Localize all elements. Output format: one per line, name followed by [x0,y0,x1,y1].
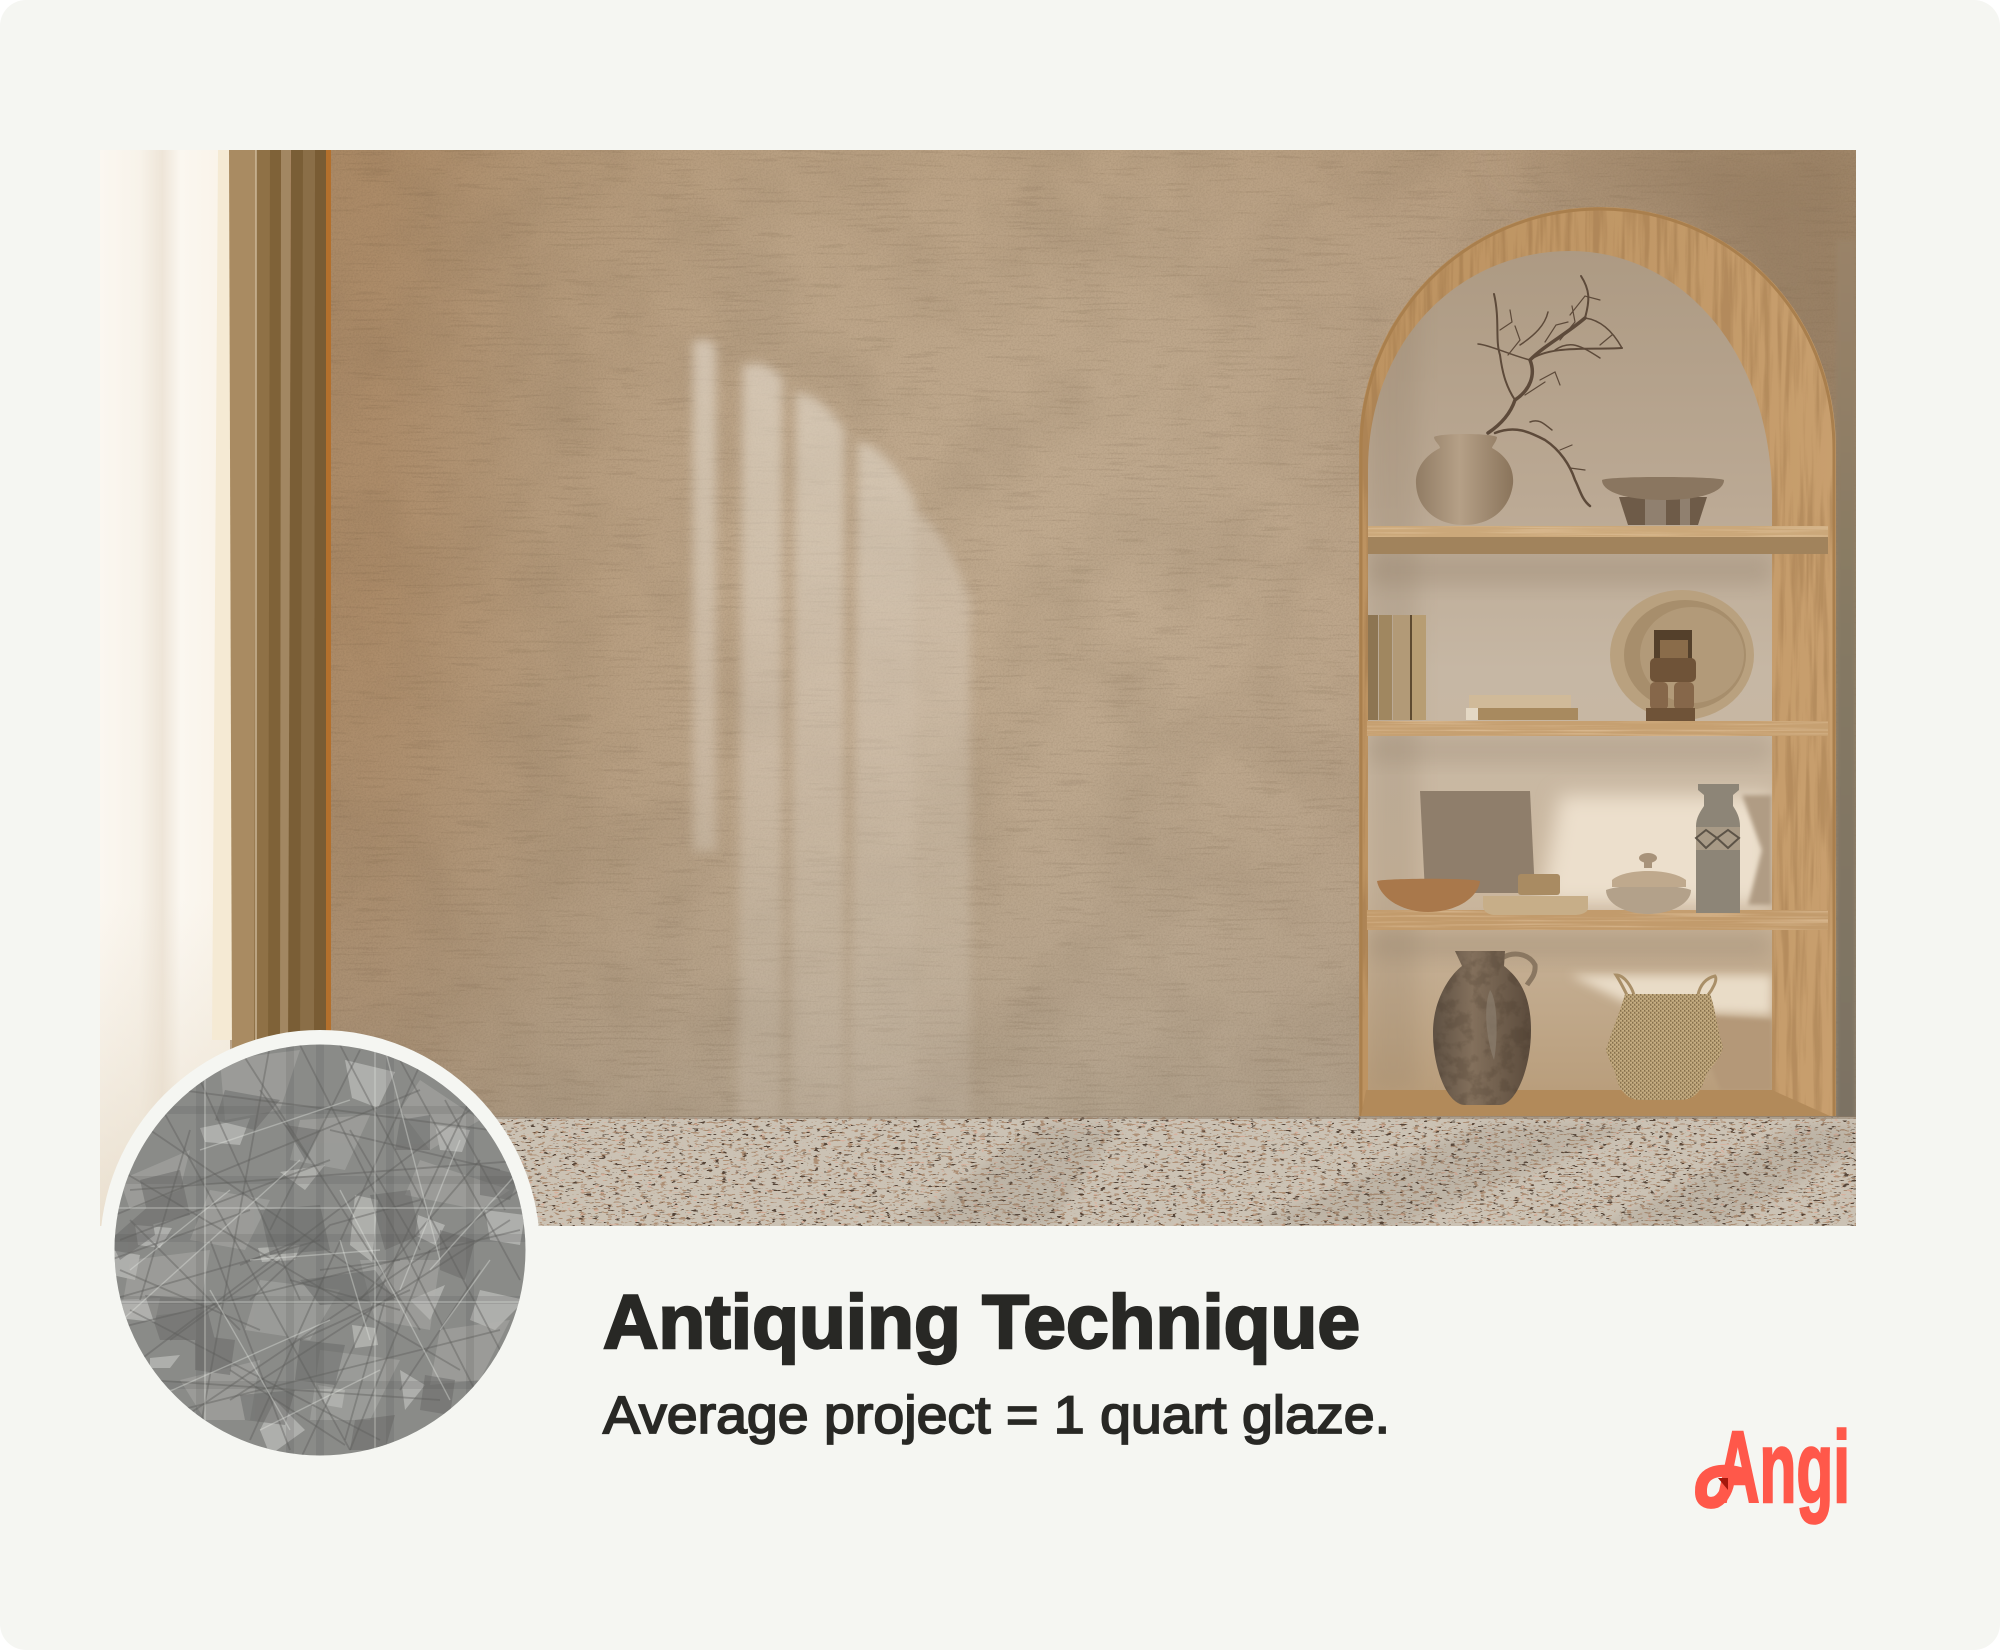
mid-tone facets [120,1050,510,1420]
hatch bands [100,1040,540,1460]
carved figurine [1646,630,1696,721]
title: Antiquing Technique [603,1280,1360,1365]
Angi logo [1701,1412,1850,1524]
woven basket [1606,975,1723,1100]
infographic canvas [100,150,1856,1525]
leaning stone tile [1420,791,1535,893]
circular glaze texture swatch [100,1030,540,1470]
shelf 2 [1367,721,1828,736]
interior photo [100,150,1856,1226]
small cup [1518,874,1560,895]
clay vase with branch [1416,276,1622,525]
lidded pot [1606,853,1691,914]
shelf 3 [1367,910,1828,930]
curtains [100,150,331,1226]
hatch lines [110,1045,530,1460]
round wooden plate [1610,590,1754,720]
window light shafts on wall [693,340,970,1120]
stacked books [1466,695,1578,720]
shelf 1 [1368,526,1828,554]
subtitle: Average project = 1 quart glaze. [603,1386,1390,1445]
light facets [110,1060,525,1455]
light and shadow on back wall [1368,251,1772,1091]
plaster wall [100,150,1856,1120]
dark facets [110,1090,520,1450]
Angi logo: Angi [1716,1412,1850,1524]
footed stone dish [1602,477,1724,525]
niche floor board [1361,1090,1830,1116]
clay jug [1433,951,1535,1105]
tall patterned vase [1696,784,1740,913]
terrazzo floor [494,1116,1856,1226]
upright books [1368,615,1426,720]
stone tray [1483,896,1588,915]
niche back wall [1368,251,1772,1090]
wooden bowl [1377,879,1480,912]
arch frame [1359,207,1836,1116]
arched wooden shelving niche [1359,207,1836,1116]
